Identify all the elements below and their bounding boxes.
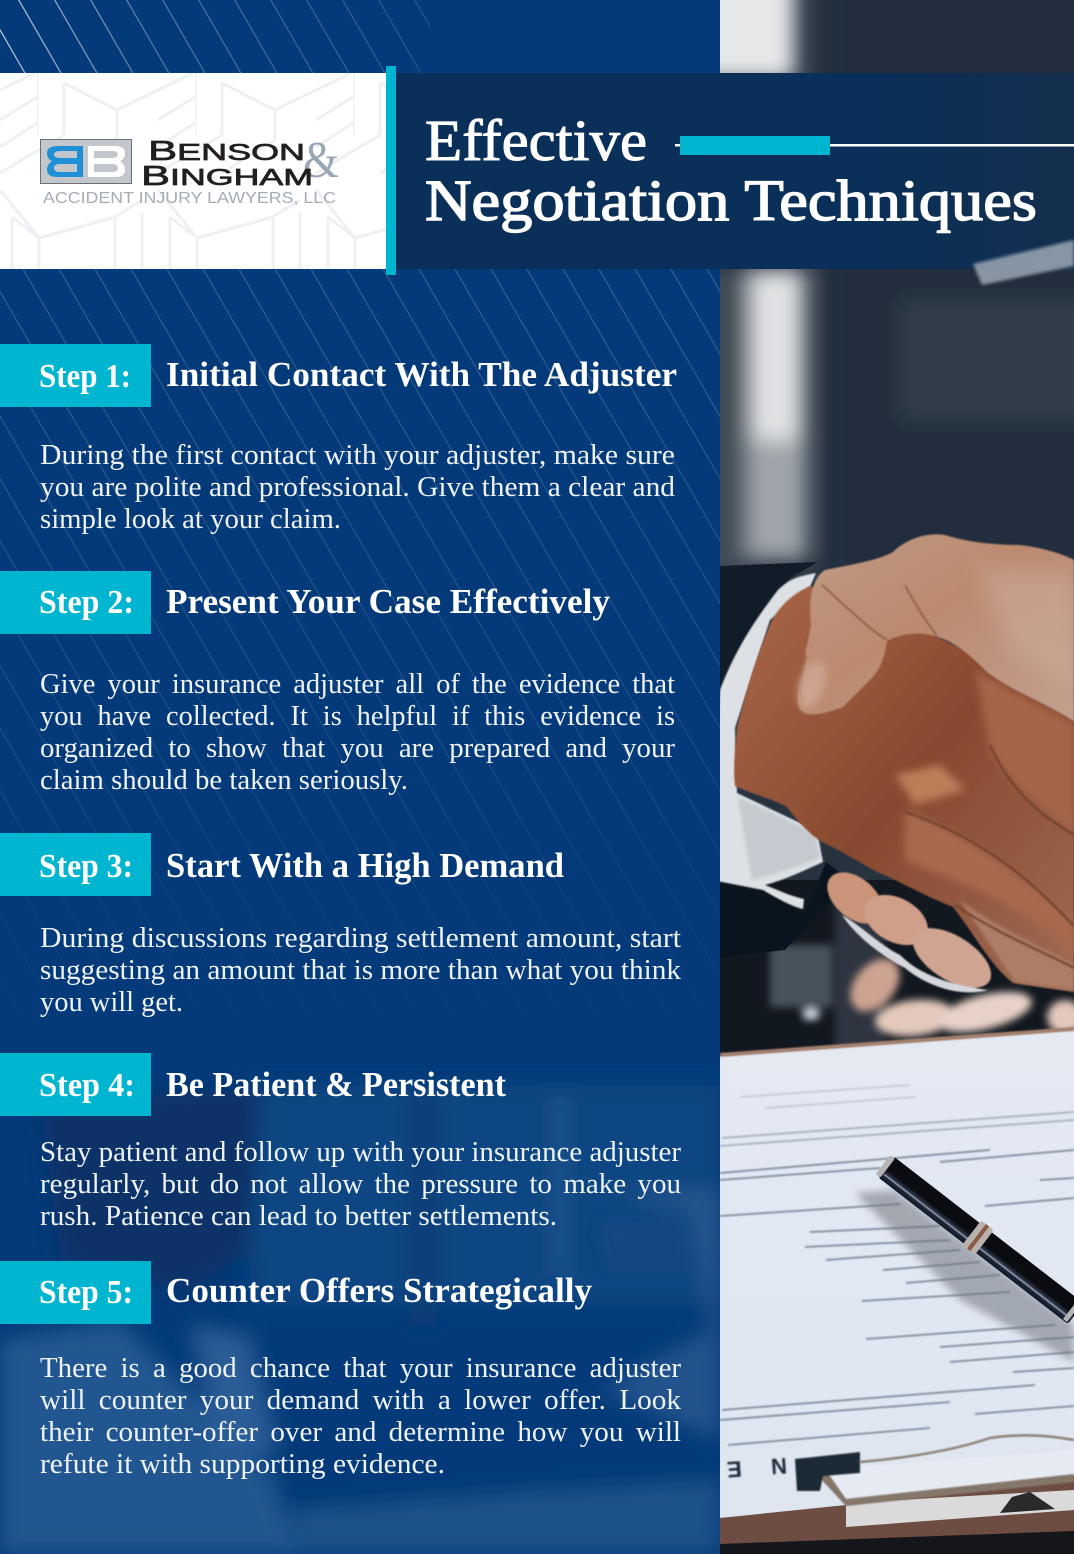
step 1 body: simple look at your claim. <box>40 503 341 535</box>
step 1 body: During the first contact with your adjuster, make sure <box>40 439 675 471</box>
pen end ring <box>1063 1305 1074 1322</box>
blurred background: shirts and office <box>690 0 1074 580</box>
pen <box>874 1152 1074 1326</box>
step 3 badge: Step 3: <box>39 848 133 885</box>
diagonal line pattern, upper band <box>0 0 430 73</box>
step 2 body: Give your insurance adjuster all of the evidence that <box>40 668 675 700</box>
step 1 badge <box>0 344 151 407</box>
teal divider <box>386 66 396 275</box>
logo mark <box>40 140 132 184</box>
pen band <box>964 1222 993 1254</box>
step 5 body <box>40 1352 682 1480</box>
title line 2: Negotiation Techniques <box>425 168 1037 233</box>
step 5 heading: Counter Offers Strategically <box>166 1271 592 1310</box>
step 5 body: will counter your demand with a lower offer. Look <box>40 1384 682 1416</box>
paper top edge <box>720 1029 1074 1055</box>
logo panel <box>0 73 386 269</box>
thumb tip tone <box>794 660 828 710</box>
step 5 <box>0 1261 682 1480</box>
clip knob <box>1000 1492 1055 1513</box>
knuckle highlight <box>895 765 965 805</box>
step 3 badge <box>0 833 151 896</box>
step 4 badge: Step 4: <box>39 1067 135 1104</box>
step 1 body <box>40 439 675 535</box>
step 4 body: Stay patient and follow up with your insurance adjuster <box>40 1136 681 1168</box>
contract paper <box>720 1030 1074 1518</box>
cuff <box>712 573 823 909</box>
pen shadow <box>855 1190 1074 1362</box>
logo geometric pattern <box>0 73 386 269</box>
step 1 body: you are polite and professional. Give them a clear and <box>40 471 675 503</box>
right finger tones <box>975 670 1074 832</box>
step 2 heading: Present Your Case Effectively <box>166 582 610 621</box>
photo: handshake over a contract <box>690 0 1074 1554</box>
jacket <box>720 562 818 695</box>
darker hand <box>734 586 1074 992</box>
waving paper edge <box>860 1435 1074 1462</box>
logo background <box>0 73 386 269</box>
contract text lines <box>720 1085 1074 1445</box>
logo name line 2: B INGHAM <box>141 160 313 191</box>
step 2 <box>0 571 675 796</box>
step 4 heading: Be Patient & Persistent <box>166 1065 506 1104</box>
white B <box>88 146 125 177</box>
step 3 heading: Start With a High Demand <box>166 846 565 885</box>
step 1 <box>0 344 677 535</box>
title line 1: Effective <box>425 108 647 173</box>
clip bracket <box>822 1473 1074 1507</box>
step 3 body <box>40 922 681 1018</box>
step 3 body: you will get. <box>40 986 183 1018</box>
step 2 body: organized to show that you are prepared and your <box>40 732 675 764</box>
background photo: office meeting tinted blue <box>0 1085 720 1554</box>
step 4 body <box>40 1136 681 1232</box>
logo tagline: ACCIDENT INJURY LAWYERS, LLC <box>43 190 336 207</box>
pen highlight <box>883 1174 1071 1319</box>
step 3 body: suggesting an amount that is more than what you think <box>40 954 681 986</box>
diagonal line pattern, main band <box>0 269 720 960</box>
clip base <box>795 1452 860 1491</box>
step 1 badge: Step 1: <box>39 358 131 395</box>
step 4 <box>0 1053 681 1232</box>
step 4 body: regularly, but do not allow the pressure to make you <box>40 1168 681 1200</box>
back of hand highlight <box>975 565 1074 690</box>
thumb creases and highlights <box>801 585 937 702</box>
white rule line <box>830 144 1074 146</box>
title accent rule <box>675 136 1074 155</box>
teal rule block <box>680 136 830 155</box>
step 4 body: rush. Patience can lead to better settlements. <box>40 1200 557 1232</box>
clipboard dark base <box>720 1531 1074 1554</box>
reversed printed letters: NE <box>726 1453 788 1482</box>
step 2 body <box>40 668 675 796</box>
knuckle creases <box>905 745 1074 968</box>
ampersand: & <box>303 132 339 189</box>
rule tick <box>675 144 681 146</box>
clip reflection <box>823 1450 1074 1498</box>
step 2 badge <box>0 571 151 634</box>
step 5 badge <box>0 1261 151 1324</box>
blurred far fingers <box>840 949 1074 1040</box>
step 5 body: There is a good chance that your insurance adjuster <box>40 1352 681 1384</box>
fingers wrapping under the hand <box>826 871 992 994</box>
step 3 <box>0 833 681 1018</box>
clip plate <box>846 1490 1074 1527</box>
pen cap <box>875 1155 895 1178</box>
step 2 badge: Step 2: <box>39 584 134 621</box>
pen band copper <box>967 1224 989 1251</box>
blurred glare stripe <box>973 240 1074 285</box>
step 5 body: their counter-offer over and determine how you will <box>40 1416 681 1448</box>
lighter hand <box>798 534 1074 721</box>
header bar <box>396 73 1074 269</box>
step 2 body: claim should be taken seriously. <box>40 764 408 796</box>
photo backdrop <box>720 0 1074 1554</box>
step 3 body: During discussions regarding settlement amount, start <box>40 922 681 954</box>
step 5 body: refute it with supporting evidence. <box>40 1448 445 1480</box>
step 5 badge: Step 5: <box>39 1274 133 1311</box>
pen barrel <box>878 1157 1074 1324</box>
dark lower backdrop <box>720 880 1074 1070</box>
inner shirt shadow <box>738 797 820 880</box>
panel: blue background <box>0 0 720 1554</box>
logo name line 1: B ENSON <box>148 135 305 166</box>
logo square <box>40 140 132 184</box>
blue B <box>47 146 83 177</box>
step 2 body: you have collected. It is helpful if this evidence is <box>40 700 675 732</box>
step 1 heading: Initial Contact With The Adjuster <box>166 355 677 394</box>
clipboard strip <box>720 1476 1074 1544</box>
title <box>425 108 1037 233</box>
step 4 badge <box>0 1053 151 1116</box>
